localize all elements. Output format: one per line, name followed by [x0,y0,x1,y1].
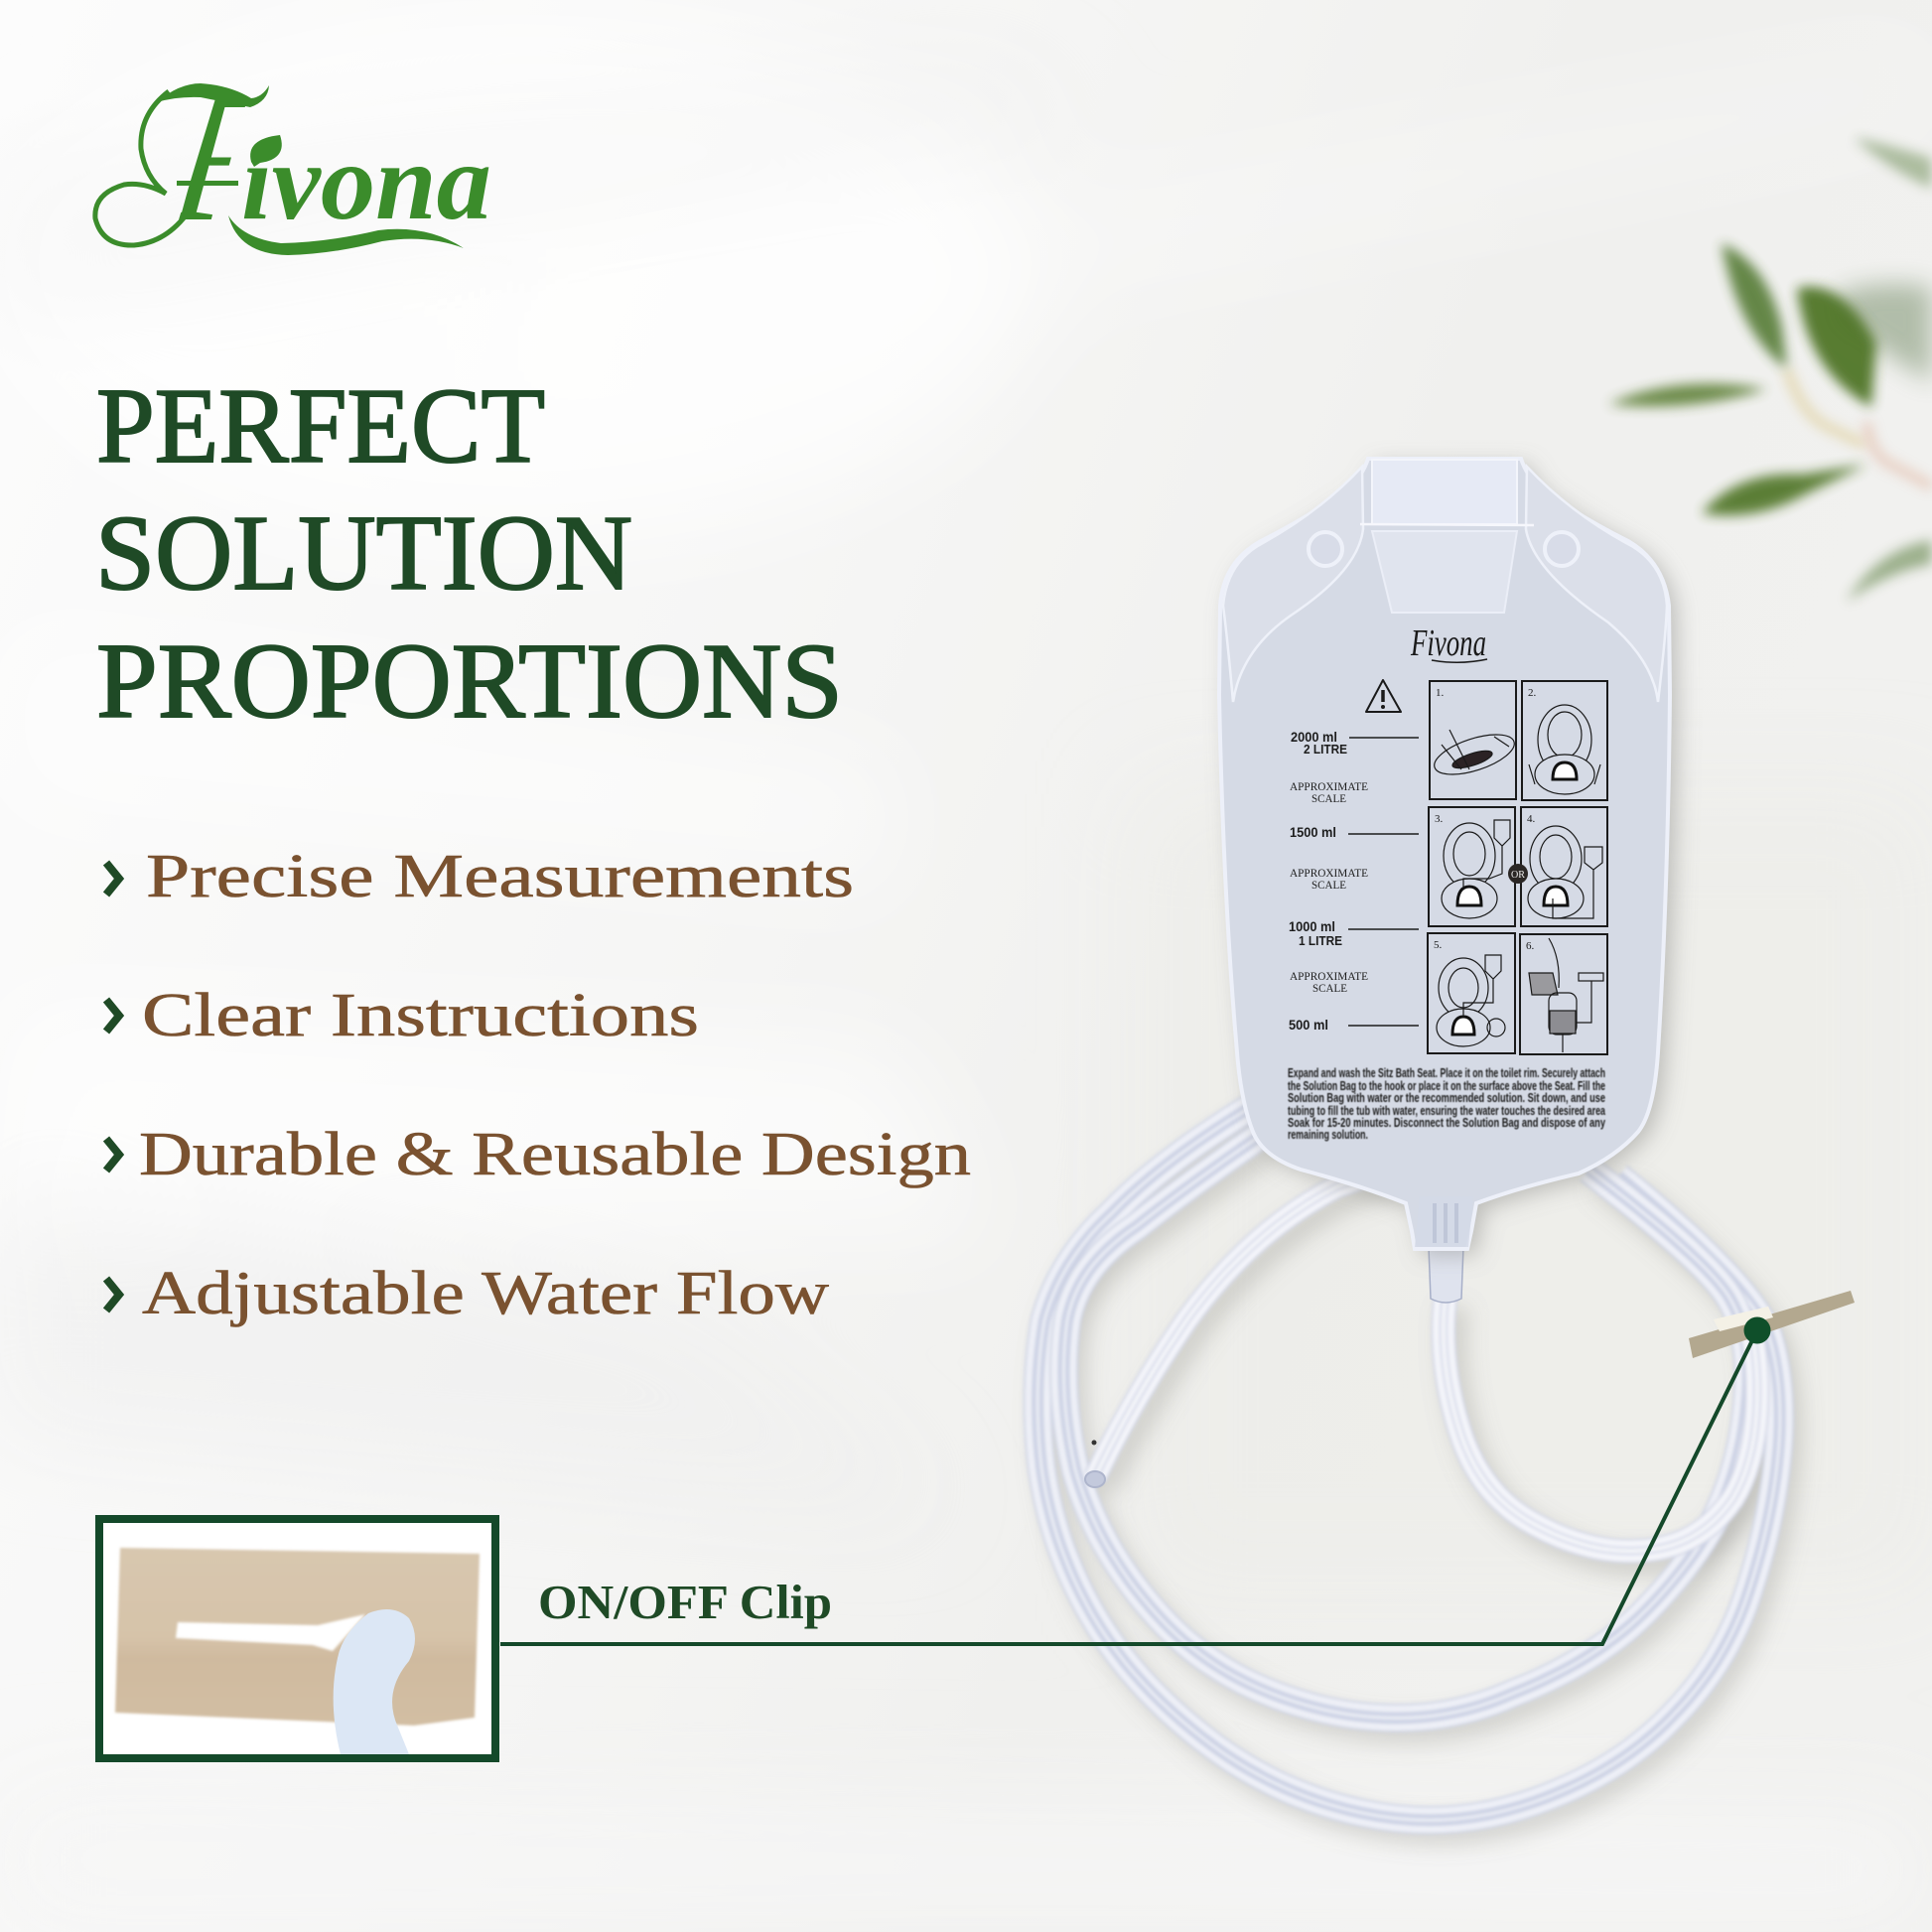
instruction panels [1428,681,1607,1054]
logo loop flourish [95,91,202,245]
tube in clip [334,1609,415,1754]
chevron 3 [106,1139,119,1171]
panel numbers: 3. [1435,813,1444,825]
blurred eucalyptus leaves [1608,137,1932,602]
scale labels: 1000 ml [1289,919,1335,934]
scale labels: SCALE [1311,791,1346,805]
hanging holes [1309,532,1579,566]
usage instructions: Solution Bag with water or the recommended solution. Sit down, and use [1288,1091,1605,1105]
callout label: ON/OFF Clip [538,1575,832,1629]
chevron 4 [106,1279,119,1311]
scale labels [1289,730,1419,1033]
usage instructions: Soak for 15-20 minutes. Disconnect the Solution Bag and dispose of any [1288,1116,1605,1130]
panel 1 drawing [1430,727,1519,782]
bag neck [1415,1196,1473,1247]
logo swash [228,215,464,255]
tube tip [1085,1440,1105,1487]
item: Durable and Reusable Design: Durable & Reusable Design [139,1121,971,1188]
scale labels: 2000 ml [1291,730,1337,745]
panel numbers [1434,687,1537,952]
callout dot [1743,1316,1771,1344]
heading [95,367,843,741]
scale labels: 1500 ml [1290,825,1336,840]
feature list [106,843,971,1327]
panel 3 drawing [1442,820,1510,918]
usage instructions: Expand and wash the Sitz Bath Seat. Place it on the toilet rim. Securely attach [1288,1066,1605,1080]
panel 6 drawing [1529,938,1603,1052]
scale labels: APPROXIMATE [1290,969,1368,983]
callout leader line [500,1330,1757,1644]
bag logo: Fivona [1410,622,1486,664]
scale labels: 1 LITRE [1299,934,1342,948]
tubing [1037,1107,1790,1832]
chevron 1 [106,863,119,895]
logo: Fivona [92,83,488,255]
logo letter F stem: F [163,58,284,260]
solution bag [1219,459,1678,1255]
panel numbers: 4. [1527,813,1535,825]
heading: PERFECT [96,367,545,485]
bag shoulders [1223,467,1667,702]
panel 2 drawing [1529,705,1600,794]
clip on tube [1689,1291,1855,1358]
panel numbers: 1. [1436,687,1444,699]
panel numbers: 5. [1434,939,1442,951]
item: Clear Instructions: Clear Instructions [142,982,699,1049]
scale labels: SCALE [1312,981,1347,995]
OR badge [1508,864,1528,884]
panel 4 drawing [1528,826,1602,918]
scale labels: APPROXIMATE [1290,866,1368,880]
logo top bar flourish [157,83,269,107]
logo crossbar [177,181,238,186]
heading: SOLUTION [95,494,632,613]
panel numbers: 6. [1526,940,1535,952]
scale labels: 2 LITRE [1304,743,1347,757]
heading: PROPORTIONS [96,622,843,741]
OR badge: OR [1511,870,1525,881]
scale labels: SCALE [1311,878,1346,892]
clip body [115,1548,480,1725]
chevron 2 [106,1000,119,1032]
usage instructions [1288,1066,1606,1142]
item: Precise Measurements: Precise Measurements [146,843,854,910]
usage instructions: the Solution Bag to the hook or place it on the surface above the Seat. Fill the [1288,1079,1605,1093]
hanger tab [1372,460,1517,524]
logo leaf [250,135,282,167]
clip detail panel [99,1519,495,1758]
item: Adjustable Water Flow: Adjustable Water Flow [142,1260,829,1327]
panel numbers: 2. [1528,687,1537,699]
scale labels: APPROXIMATE [1290,779,1368,793]
usage instructions: tubing to fill the tub with water, ensuring the water touches the desired area [1288,1104,1606,1118]
pocket [1372,531,1517,613]
panel 5 drawing [1437,955,1505,1046]
usage instructions: remaining solution. [1288,1128,1368,1142]
logo letters: ivona [241,121,491,242]
scale labels: 500 ml [1289,1018,1328,1033]
warning icon [1366,680,1401,712]
tube connector [1429,1247,1463,1303]
